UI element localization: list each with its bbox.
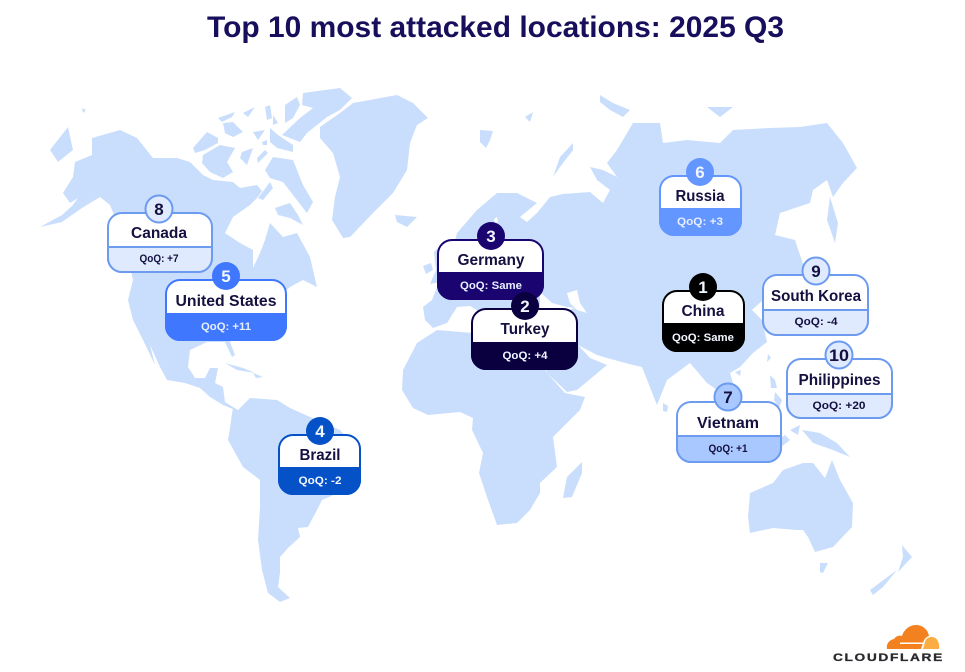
QoQ change: QoQ: +11 [201,321,251,333]
South America [228,398,358,602]
name: Vietnam [697,415,759,432]
rank number: 10 [829,346,849,365]
QoQ band [663,324,744,351]
card: Brazil [279,417,360,494]
rank badge [146,196,172,222]
New Guinea [802,430,850,457]
Australia [748,460,853,552]
North America [40,130,317,412]
Greenland [320,95,428,238]
Arctic Eurasian islands [480,95,733,177]
Axel Heiberg Island [285,97,300,123]
QoQ band [763,310,868,335]
Eurasia [423,123,857,405]
Ellesmere Island [282,88,352,142]
card body [472,309,577,369]
Baffin Island [265,157,313,213]
Cloudflare logo [833,625,944,664]
card body [279,435,360,494]
card: United States [166,262,286,340]
rank number: 5 [221,267,231,286]
Arctic islands [82,105,303,225]
QoQ change: QoQ: -4 [794,316,838,328]
inland seas [494,217,587,313]
New Zealand [870,545,912,595]
card body [166,280,286,340]
QoQ change: QoQ: +3 [677,216,723,228]
name: South Korea [771,288,861,305]
Victoria Island [202,145,235,178]
QoQ change: QoQ: -2 [298,475,342,487]
rank badge [714,384,742,410]
card body [677,402,781,462]
Caribbean [225,363,263,378]
card: Germany [438,222,543,299]
rank badge [686,158,714,186]
rank badge [212,262,240,290]
rank number: 8 [154,200,164,219]
QoQ band [660,209,741,235]
world map [40,88,912,602]
card: Canada [108,196,212,272]
name: Germany [458,252,525,269]
Banks Island [193,132,218,153]
QoQ change: QoQ: +4 [502,350,548,362]
Africa [402,330,585,525]
rank badge [306,417,334,445]
Britain and Ireland [423,244,446,284]
rank number: 6 [695,163,705,182]
rank number: 1 [698,278,708,297]
icon: cloud highlight [900,642,923,644]
rank badge [802,258,830,284]
QoQ band [472,343,577,369]
icon: cloud main [887,625,929,649]
QoQ change: QoQ: +7 [140,253,178,265]
Madagascar [563,462,582,498]
Southeast Asian islands [770,375,800,452]
rank badge [477,222,505,250]
rank badge [826,342,852,368]
Iceland [395,215,417,227]
card: South Korea [763,258,868,335]
card body [660,176,741,235]
QoQ band [279,468,360,494]
Taiwan, Hainan and Sri Lanka [663,354,771,412]
rank badge [689,273,717,301]
Chukotka tip [50,127,73,162]
rank number: 9 [811,262,821,281]
rank number: 3 [486,227,496,246]
name: Turkey [500,321,550,338]
QoQ change: QoQ: +1 [708,443,748,455]
rank number: 7 [723,388,733,407]
card body [763,275,868,335]
card body [787,359,892,418]
icon: cloud light [923,637,939,649]
rank number: 4 [315,422,325,441]
name: Brazil [300,447,340,464]
title: Top 10 most attacked locations: 2025 Q3 [207,11,784,44]
card body [438,240,543,299]
QoQ band [166,314,286,340]
card: Philippines [787,342,892,418]
QoQ band [438,273,543,299]
rank badge [511,292,539,320]
Tasmania [820,563,828,573]
name: China [682,303,725,320]
name: Philippines [798,372,881,389]
card: Russia [660,158,741,235]
card: Turkey [472,292,577,369]
name: Russia [676,188,725,205]
card: Vietnam [677,384,781,462]
card body [663,291,744,351]
wordmark: CLOUDFLARE [833,651,944,664]
QoQ band [787,394,892,418]
QoQ band [108,247,212,272]
QoQ change: QoQ: Same [460,280,522,292]
name: United States [176,293,277,310]
QoQ change: QoQ: +20 [812,400,866,412]
card: China [663,273,744,351]
rank number: 2 [520,297,530,316]
card body [108,213,212,272]
QoQ band [677,436,781,462]
Sakhalin [827,197,838,243]
QoQ change: QoQ: Same [672,332,734,344]
name: Canada [131,225,187,242]
